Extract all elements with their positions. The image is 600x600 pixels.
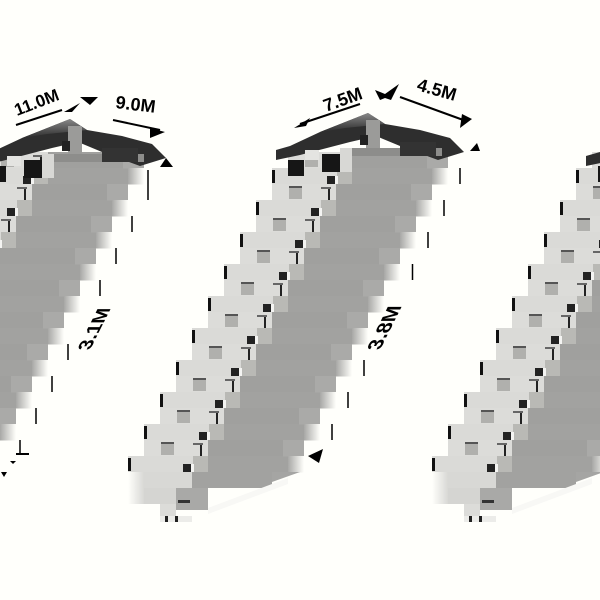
right shed [432,119,600,522]
left dimension arrows [1,97,173,477]
centre width label: 7.5M [321,83,365,116]
centre dimension arrows [294,84,480,463]
left shed [0,119,166,522]
left width label: 11.0M [12,85,62,120]
left height label: 3.1M [74,308,116,350]
centre shed [128,113,464,522]
left depth label: 9.0M [115,92,157,117]
centre depth label: 4.5M [415,75,459,105]
centre height label: 3.8M [363,306,407,350]
